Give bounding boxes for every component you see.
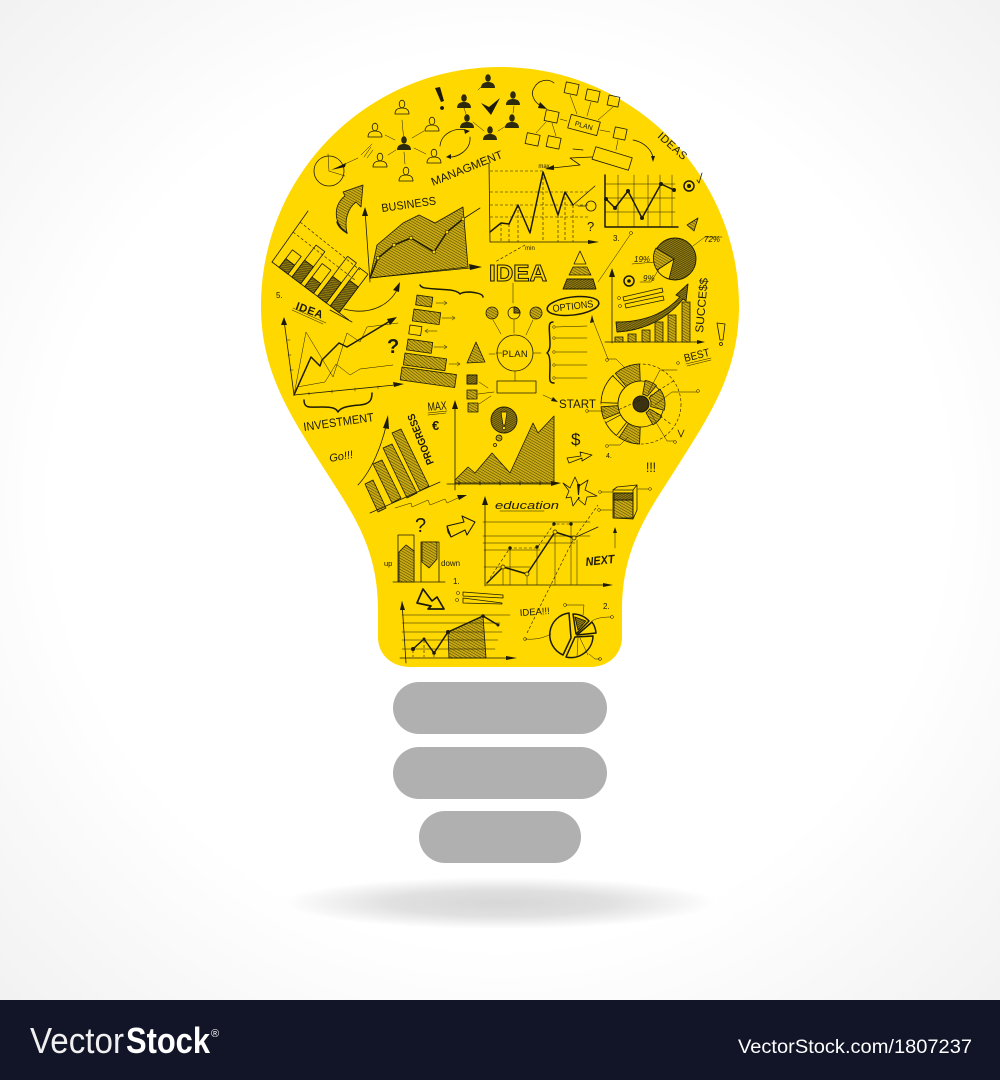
label: 3. with leader: 3. [613, 234, 620, 243]
icon: bold outlined down arrow [417, 589, 444, 609]
sketch: dashed peak line chart [489, 163, 599, 262]
label: 5.: 5. [276, 291, 283, 300]
label: Next: NEXT [585, 552, 617, 569]
sketch: progress bars [358, 415, 467, 513]
label: Max and euro: € [432, 418, 439, 433]
label: Idea with underline: IDEA [294, 301, 325, 322]
sketch: exploded pie chart: 2. [603, 602, 610, 611]
label: 4.: 4. [606, 453, 612, 460]
sketch: exploded pie chart [524, 602, 614, 660]
ground shadow [282, 877, 718, 929]
sketch: plan mind-map with pie nodes: PLAN [502, 349, 528, 360]
sketch: rotated bar chart [272, 211, 379, 320]
icon: target and check [684, 173, 702, 191]
label: Options [546, 294, 600, 318]
footer logo: Stock [126, 1020, 211, 1061]
label: Max and euro [427, 398, 447, 433]
icon: small target [624, 276, 634, 286]
footer logo: Vector [30, 1020, 124, 1061]
label: Start with arrow [543, 395, 596, 411]
label: Best: BEST [683, 347, 711, 365]
sketch: investment line chart [281, 317, 404, 395]
sketch: brace [304, 393, 372, 412]
sketch: dashed peak line chart: min [525, 246, 535, 252]
sketch: option list with brace [547, 322, 587, 383]
icon: 3D outlined arrow [447, 516, 475, 537]
icon: dollar sign and arrow: $ [571, 430, 581, 449]
sketch: education line chart [482, 496, 617, 633]
sketch: pyramid [563, 251, 596, 289]
yellow light bulb [261, 67, 739, 667]
label: Start with arrow: START [559, 399, 596, 411]
sketch: curved arrow [330, 282, 400, 322]
sketch: success rising bars [605, 268, 705, 344]
sketch: rotated horizontal bar list [400, 285, 483, 388]
bulb base: grey screw bars [393, 682, 607, 863]
footer bar [0, 1000, 1000, 1080]
sketch: up and down bars: up [384, 559, 392, 568]
label: Options: OPTIONS [552, 299, 594, 315]
icon: starburst with exclamation [563, 477, 597, 506]
sketch: small pyramid and boxes [467, 342, 536, 412]
label: Ideas: IDEAS [655, 130, 689, 163]
footer logo: ® [211, 1028, 219, 1040]
sketch: up and down bars: 1. [453, 577, 460, 586]
sketch: up and down bars: down [441, 559, 460, 568]
sketch: hatched pie chart with percentages: 9% [643, 274, 655, 283]
label: Business: BUSINESS [381, 195, 437, 215]
sketch: dashed peak line chart: ? [587, 219, 594, 234]
label: !!!: !!! [646, 459, 656, 475]
label: Max and euro: MAX [427, 398, 447, 414]
sketch: business area chart [362, 207, 482, 282]
sketch: plan flow chart [525, 80, 655, 170]
sketch: 3D curved arrow [336, 185, 363, 233]
label: question mark: ? [387, 336, 399, 358]
label: Success: SUCCE$$ [694, 277, 711, 333]
sketch: hatched pie chart with percentages [632, 235, 722, 283]
footer logo [30, 1020, 219, 1061]
sketch: hatched area chart with exclamation bubble [447, 400, 561, 490]
label: question mark small: ? [415, 515, 426, 537]
sketch: people network [368, 74, 520, 181]
label: Go!!!: Go!!! [328, 449, 354, 465]
sketch: bottom line and area chart [400, 601, 517, 663]
footer image id: VectorStock.com/1807237 [738, 1036, 972, 1058]
sketch: plan flow chart: PLAN [574, 121, 593, 132]
label: Progress: PROGRESS [405, 412, 437, 466]
icon: dollar sign and arrow [567, 430, 592, 463]
sketch: hatched pie chart with percentages: 19% [634, 255, 650, 264]
sketch: radial wheel chart [586, 315, 699, 447]
label: Investment: INVESTMENT [302, 410, 375, 434]
sketch: dashed peak line chart: max [538, 164, 550, 170]
sketch: hatched pie chart with percentages: 72% [704, 235, 720, 244]
label: Management: MANAGMENT [430, 149, 505, 189]
sketch: 3D box [598, 485, 651, 519]
icon: exclamation [717, 323, 725, 346]
sketch: grid line chart [604, 175, 678, 227]
sketch: small pie chart [314, 144, 373, 186]
sketch: small lines [455, 591, 503, 604]
sketch: up and down bars [384, 535, 460, 586]
label: Idea!!!: IDEA!!! [519, 606, 550, 619]
sketch: plan mind-map with pie nodes [486, 283, 542, 381]
label: 3. with leader [598, 232, 632, 282]
icon: small triangle [687, 218, 698, 231]
label: Idea outline: IDEA [489, 260, 547, 286]
label: Education: education [495, 500, 559, 512]
